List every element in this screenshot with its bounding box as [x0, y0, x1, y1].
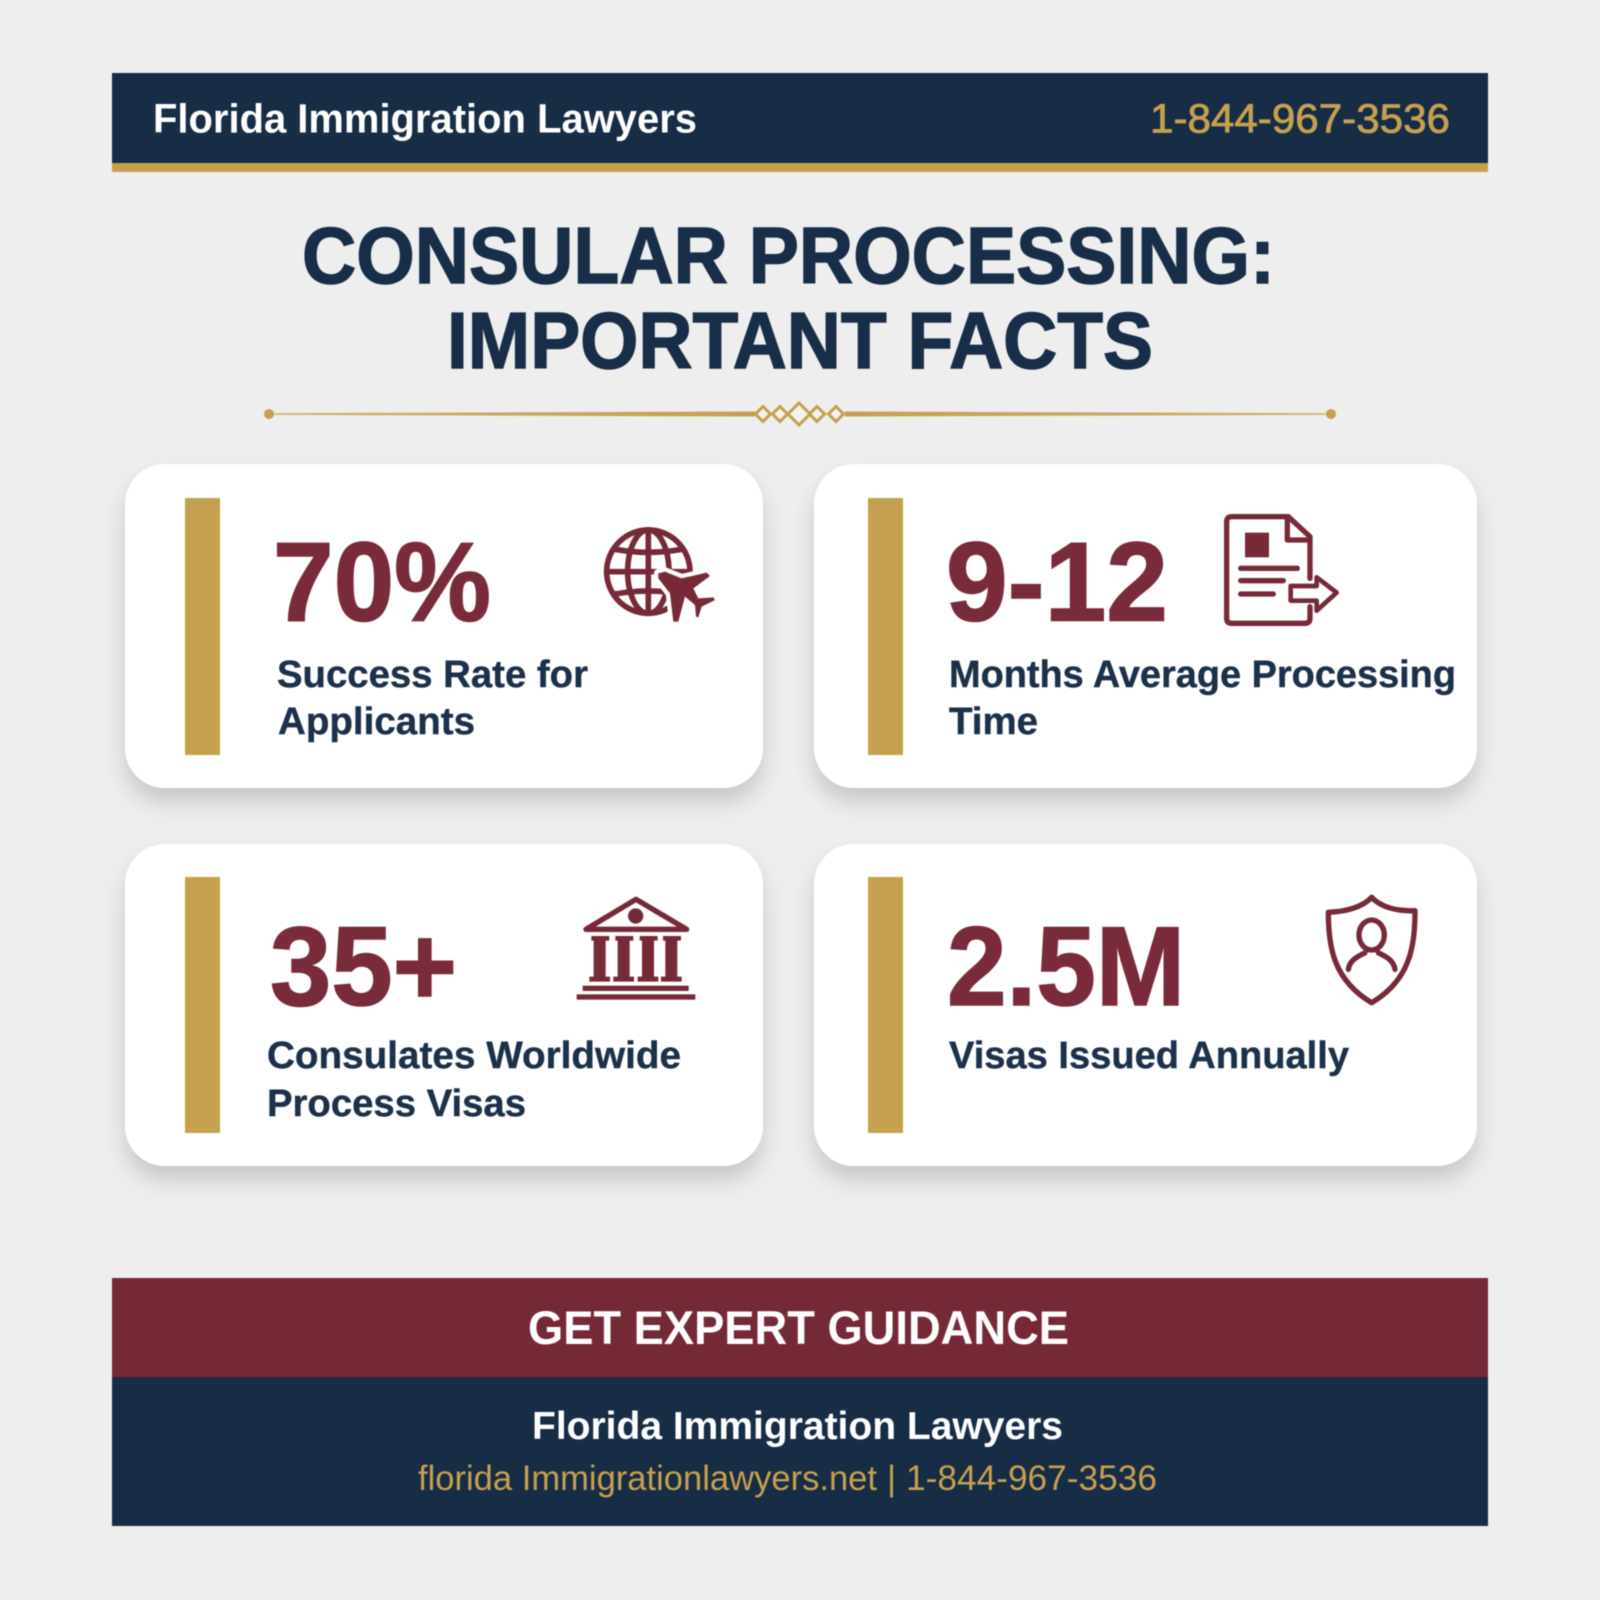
title divider ornament [264, 403, 1336, 425]
label: success rate: Applicants [278, 701, 475, 743]
label: consulates: Process Visas [267, 1083, 526, 1125]
accent bar [868, 877, 903, 1133]
panel: consulates [125, 844, 763, 1166]
header phone number: 1-844-967-3536 [1150, 96, 1450, 142]
label: visas issued: Visas Issued Annually [949, 1035, 1349, 1077]
header firm name: Florida Immigration Lawyers [153, 96, 697, 142]
label: consulates [267, 1035, 681, 1125]
icon: consulate building [577, 899, 695, 1000]
footer website and phone: | [887, 1459, 896, 1498]
panel: success rate [125, 464, 763, 788]
stat: 9-12: 9-12 [946, 520, 1168, 644]
label: processing time: Time [949, 701, 1038, 743]
footer website and phone: florida Immigrationlawyers.net [418, 1459, 877, 1498]
stat: 35+: 35+ [270, 904, 457, 1029]
header banner [112, 73, 1488, 172]
stat: 70%: 70% [273, 520, 491, 644]
panel: visas issued [814, 844, 1477, 1166]
label: consulates: Consulates Worldwide [267, 1035, 681, 1077]
icon: document with arrow [1227, 517, 1337, 623]
accent bar [185, 498, 220, 755]
accent bar [185, 877, 220, 1133]
footer contact band [112, 1377, 1488, 1526]
call to action text: GET EXPERT GUIDANCE [528, 1301, 1069, 1354]
icon: shield with person [1328, 897, 1415, 1003]
title [302, 211, 1275, 385]
footer website and phone [418, 1459, 1157, 1498]
label: success rate: Success Rate for [277, 654, 588, 696]
label: processing time: Months Average Processing [949, 654, 1456, 696]
accent bar [868, 498, 903, 755]
label: processing time [949, 654, 1456, 743]
icon: globe with airplane [607, 530, 715, 622]
title: CONSULAR PROCESSING: [302, 211, 1275, 300]
panel: processing time [814, 464, 1477, 788]
title: IMPORTANT FACTS [447, 296, 1153, 385]
label: success rate [277, 654, 588, 743]
call to action band [112, 1278, 1488, 1377]
footer website and phone: 1-844-967-3536 [906, 1459, 1157, 1498]
stat: 2.5M: 2.5M [947, 904, 1185, 1029]
footer firm name: Florida Immigration Lawyers [532, 1405, 1063, 1448]
